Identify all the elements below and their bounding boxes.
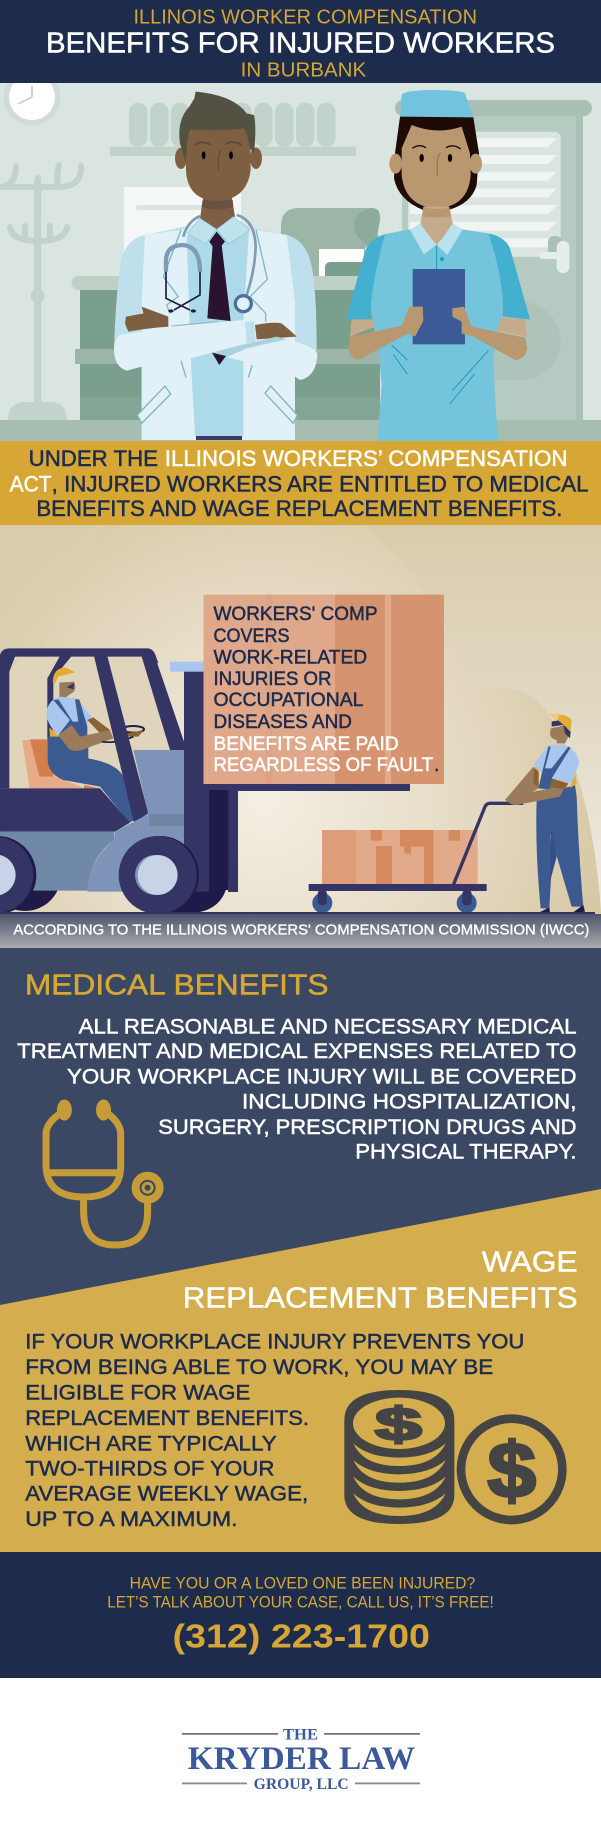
doctor tie (207, 232, 231, 321)
text block: call to action lines: HAVE YOU OR A LOVED ONE BEEN INJURED? (130, 1575, 475, 1593)
nurse collar (410, 223, 463, 255)
text block: wage description: AVERAGE WEEKLY WAGE, (25, 1481, 308, 1505)
panel: gold intro band: , INJURED WORKERS ARE ENTITLED TO MEDICAL (52, 471, 588, 496)
icon: stethoscope (46, 1100, 164, 1245)
panel: gold intro band (0, 441, 601, 525)
header band (0, 0, 601, 83)
panel: gold intro band: UNDER THE (29, 446, 158, 471)
text block: wage description: FROM BEING ABLE TO WORK, YOU MAY BE (25, 1355, 493, 1379)
trolley (309, 803, 523, 913)
panel: clinic illustration (0, 68, 601, 441)
boxes on trolley (322, 830, 478, 884)
logo: Kryder Law Group: KRYDER LAW (188, 1741, 415, 1777)
text block: medical description (17, 1014, 577, 1164)
text block: wage description: UP TO A MAXIMUM. (25, 1507, 238, 1531)
icon: coins: $ (488, 1426, 536, 1514)
logo: Kryder Law Group: THE (283, 1726, 318, 1743)
forklift wheels (0, 836, 199, 914)
icon: stethoscope on doctor (166, 215, 256, 313)
text block: call to action lines (107, 1575, 494, 1611)
text block: medical description: ALL REASONABLE AND NECESSARY MEDICAL (79, 1014, 577, 1038)
reception counter (72, 208, 392, 420)
panel: gold intro band: BENEFITS AND WAGE REPLACEMENT BENEFITS. (36, 496, 562, 521)
logo: Kryder Law Group (182, 1726, 420, 1793)
nurse clipboard (413, 269, 465, 344)
doctor hands (125, 307, 297, 339)
panel: medical benefits (0, 948, 601, 1308)
text block: call to action lines: LET’S TALK ABOUT YOUR CASE, CALL US, IT’S FREE! (107, 1593, 494, 1611)
icon: coins: $ (375, 1398, 422, 1450)
text block: wage description: REPLACEMENT BENEFITS. (25, 1406, 309, 1430)
panel: gold intro band: ACT (10, 471, 52, 496)
trolley and worker (309, 713, 585, 913)
panel: gold intro band: ILLINOIS WORKERS’ COMPENSATION (165, 446, 568, 471)
icon: wall clock (4, 68, 60, 126)
floor (0, 420, 601, 441)
door and blinds (395, 100, 592, 420)
carried box with text: . (434, 755, 439, 776)
carried box with text (204, 595, 444, 784)
carried box with text: REGARDLESS OF FAULT (214, 755, 433, 776)
text block: medical description: TREATMENT AND MEDICAL EXPENSES RELATED TO (17, 1039, 576, 1063)
doctor figure (114, 92, 317, 440)
doctor crossed arms (114, 320, 317, 380)
heading: wage replacement: REPLACEMENT BENEFITS (183, 1283, 578, 1315)
panel: warehouse illustration (0, 525, 601, 914)
heading: wage replacement: WAGE (482, 1247, 578, 1279)
carried box with text: OCCUPATIONAL (214, 690, 363, 711)
header line: subtitle: ILLINOIS WORKER COMPENSATION (134, 5, 477, 28)
panel: wage replacement benefits (0, 1189, 601, 1552)
header line: main title: BENEFITS FOR INJURED WORKERS (46, 28, 555, 60)
icon: coins (344, 1390, 562, 1524)
forklift cab frame (0, 648, 184, 788)
source bar (0, 914, 601, 948)
text block: wage description: ELIGIBLE FOR WAGE (25, 1381, 250, 1405)
doctor collar (187, 217, 250, 244)
wall poster (124, 187, 241, 287)
text block: wage description: TWO-THIRDS OF YOUR (25, 1456, 274, 1480)
heading: wage replacement (183, 1247, 578, 1315)
carried box with text: COVERS (214, 626, 290, 647)
forklift body (0, 672, 209, 892)
phone number: (312) 223-1700 (172, 1618, 430, 1655)
carried box with text: DISEASES AND (214, 712, 352, 733)
carried box with text: INJURIES OR (214, 669, 332, 690)
forklift driver (46, 667, 144, 823)
nurse uniform (346, 229, 530, 441)
nurse hands (348, 307, 527, 360)
header line: location: IN BURBANK (241, 59, 367, 82)
text block: medical description: PHYSICAL THERAPY. (355, 1140, 576, 1164)
forklift seat (22, 739, 100, 788)
logo: Kryder Law Group: GROUP, LLC (254, 1776, 349, 1793)
forklift with driver (0, 648, 228, 914)
text block: wage description: WHICH ARE TYPICALLY (25, 1431, 277, 1455)
carried box with text: WORK-RELATED (214, 648, 367, 668)
nurse arms (350, 318, 527, 337)
text block: wage description (25, 1330, 524, 1531)
standing worker (505, 713, 585, 913)
nurse figure (346, 90, 530, 441)
text block: medical description: SURGERY, PRESCRIPTION DRUGS AND (158, 1115, 577, 1139)
source bar: ACCORDING TO THE ILLINOIS WORKERS' COMPENSATION COMMISSION (IWCC) (13, 922, 589, 938)
carried box with text: BENEFITS ARE PAID (214, 734, 399, 755)
coat rack (0, 165, 81, 420)
panel: call to action (0, 1552, 601, 1678)
heading: medical benefits: MEDICAL BENEFITS (25, 969, 329, 1001)
doctor head (175, 92, 262, 201)
forklift mast back and fork (208, 784, 410, 892)
shelf with jars (110, 103, 356, 156)
text block: wage description: IF YOUR WORKPLACE INJURY PREVENTS YOU (25, 1330, 524, 1354)
carried box with text: WORKERS' COMP (214, 604, 378, 625)
text block: medical description: YOUR WORKPLACE INJURY WILL BE COVERED (67, 1064, 576, 1088)
doctor pockets (137, 361, 297, 423)
text block: medical description: INCLUDING HOSPITALIZATION, (242, 1089, 576, 1113)
